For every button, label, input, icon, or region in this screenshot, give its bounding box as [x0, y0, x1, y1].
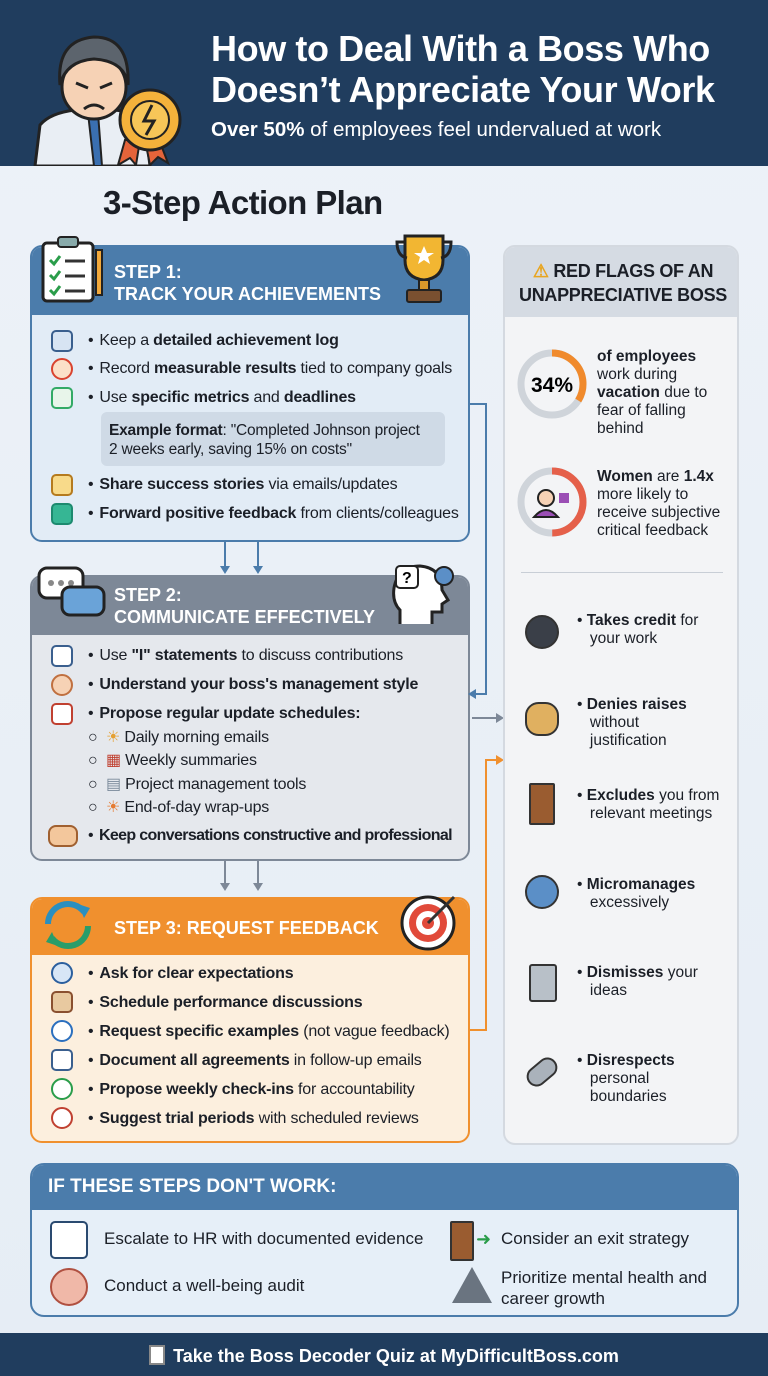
step 1 header: [32, 247, 472, 315]
step 2 items: [48, 645, 452, 847]
stat: 34% donut: 34%: [531, 374, 573, 397]
step 1 header: STEP 1:: [114, 262, 182, 282]
panel: step 1: [30, 245, 470, 542]
step 2 header: [32, 577, 472, 635]
step 3 items: Suggest trial periods with scheduled reviews: [99, 1110, 419, 1127]
step 2 items: ○ ☀ Daily morning emails: [88, 729, 269, 746]
step 2 items: Use "I" statements to discuss contributions: [99, 647, 403, 664]
arrows: step1 to step2: [220, 542, 263, 574]
step 2 items: Propose regular update schedules:: [99, 705, 360, 722]
step 3 items: Document all agreements in follow-up emails: [99, 1052, 422, 1069]
red flag items: your work: [590, 630, 657, 647]
red flag items: • Disrespects: [577, 1052, 675, 1069]
header banner: [0, 0, 768, 166]
stat: 34% donut: fear of falling: [597, 402, 686, 419]
red flag items: [525, 612, 719, 1105]
red flag items: ideas: [590, 982, 627, 999]
icon: cycle arrows: [45, 901, 91, 949]
example format box: 2 weeks early, saving 15% on costs": [109, 441, 352, 458]
title: How to Deal With a Boss Who: [211, 28, 710, 69]
red flag items: boundaries: [590, 1088, 667, 1105]
footer: Take the Boss Decoder Quiz at MyDifficultBoss.com: [173, 1346, 619, 1366]
red flags header: ⚠ RED FLAGS OF AN: [533, 261, 713, 281]
stat: 34% donut: vacation due to: [597, 384, 707, 401]
red flag items: personal: [590, 1070, 649, 1087]
icon: speech bubbles: [38, 566, 106, 616]
icon: angry boss with broken award: [34, 36, 182, 166]
panel: if these steps don't work: ➜: [476, 1229, 491, 1249]
red flag items: justification: [590, 732, 667, 749]
stat: 34% donut: work during: [597, 366, 677, 383]
step 2 items: ○ ☀ End-of-day wrap-ups: [88, 799, 269, 816]
icon: target: [400, 896, 456, 950]
red flag items: relevant meetings: [590, 805, 712, 822]
step 1 items: [51, 330, 459, 525]
panel: step 2: [30, 575, 470, 861]
footer: [0, 1333, 768, 1376]
title: [211, 28, 715, 110]
step 1 items: Use specific metrics and deadlines: [99, 389, 356, 406]
step 1 items: Forward positive feedback from clients/colleagues: [99, 505, 459, 522]
subtitle: Over 50% of employees feel undervalued at work: [211, 118, 661, 141]
step 2 items: ○ ▤ Project management tools: [88, 776, 306, 793]
arrows: step2 to step3: [220, 861, 263, 891]
red flags header: [505, 247, 741, 317]
stat: women 1.4x donut: [518, 468, 720, 539]
red flag items: • Denies raises: [577, 696, 687, 713]
example format box: [101, 412, 445, 466]
stat: 34% donut: behind: [597, 420, 644, 437]
step 2 items: ○ ▦ Weekly summaries: [88, 752, 257, 769]
fallback items: [50, 1221, 88, 1259]
step 2 items: Keep conversations constructive and professional: [99, 827, 452, 844]
panel: step 3: [30, 897, 470, 1143]
stat: women 1.4x donut: critical feedback: [597, 522, 708, 539]
step 3 items: Schedule performance discussions: [99, 994, 362, 1011]
stat: 34% donut: [518, 348, 707, 437]
icon: head with gear: ?: [402, 570, 412, 587]
step 1 items: Keep a detailed achievement log: [99, 332, 339, 349]
step 1 header: TRACK YOUR ACHIEVEMENTS: [114, 284, 381, 304]
red flag items: • Takes credit for: [577, 612, 698, 629]
step 2 items: Understand your boss's management style: [99, 676, 418, 693]
fallback header: [32, 1165, 741, 1210]
panel: if these steps don't work: career growth: [501, 1289, 605, 1308]
step 1 items: Share success stories via emails/updates: [99, 476, 397, 493]
panel: if these steps don't work: [30, 1163, 739, 1317]
step 3 items: Propose weekly check-ins for accountability: [99, 1081, 415, 1098]
icon: clipboard: [42, 236, 103, 302]
stat: women 1.4x donut: Women are 1.4x: [597, 468, 714, 485]
red flag items: • Excludes you from: [577, 787, 719, 804]
icon: head with gear: [392, 564, 454, 624]
red flag items: • Micromanages: [577, 876, 695, 893]
step 2 header: STEP 2:: [114, 585, 182, 605]
connector arrows to red flags panel: [468, 403, 503, 1031]
step 3 header: STEP 3: REQUEST FEEDBACK: [114, 918, 379, 938]
red flag items: • Dismisses your: [577, 964, 698, 981]
red flag items: excessively: [590, 894, 669, 911]
stat: women 1.4x donut: more likely to: [597, 486, 688, 503]
red flags header: UNAPPRECIATIVE BOSS: [519, 285, 727, 305]
section heading: 3-Step Action Plan: [103, 184, 383, 221]
step 3 items: Request specific examples (not vague feedback): [99, 1023, 450, 1040]
fallback header: IF THESE STEPS DON'T WORK:: [48, 1176, 336, 1197]
panel: if these steps don't work: Escalate to HR with documented evidence: [104, 1229, 423, 1248]
title: Doesn’t Appreciate Your Work: [211, 69, 715, 110]
panel: if these steps don't work: Conduct a well-being audit: [104, 1276, 304, 1295]
panel: red flags: [503, 245, 739, 1145]
step 3 header: [32, 899, 472, 955]
panel: if these steps don't work: Consider an exit strategy: [501, 1229, 689, 1248]
step 2 header: COMMUNICATE EFFECTIVELY: [114, 607, 375, 627]
panel: if these steps don't work: Prioritize mental health and: [501, 1268, 707, 1287]
step 3 items: Ask for clear expectations: [99, 965, 293, 982]
icon: trophy: [396, 234, 452, 303]
red flag items: without: [590, 714, 639, 731]
stat: women 1.4x donut: receive subjective: [597, 504, 720, 521]
step 1 items: Record measurable results tied to company goals: [99, 360, 452, 377]
example format box: Example format: "Completed Johnson project: [109, 422, 420, 439]
step 3 items: [51, 962, 450, 1129]
stat: 34% donut: of employees: [597, 348, 696, 365]
